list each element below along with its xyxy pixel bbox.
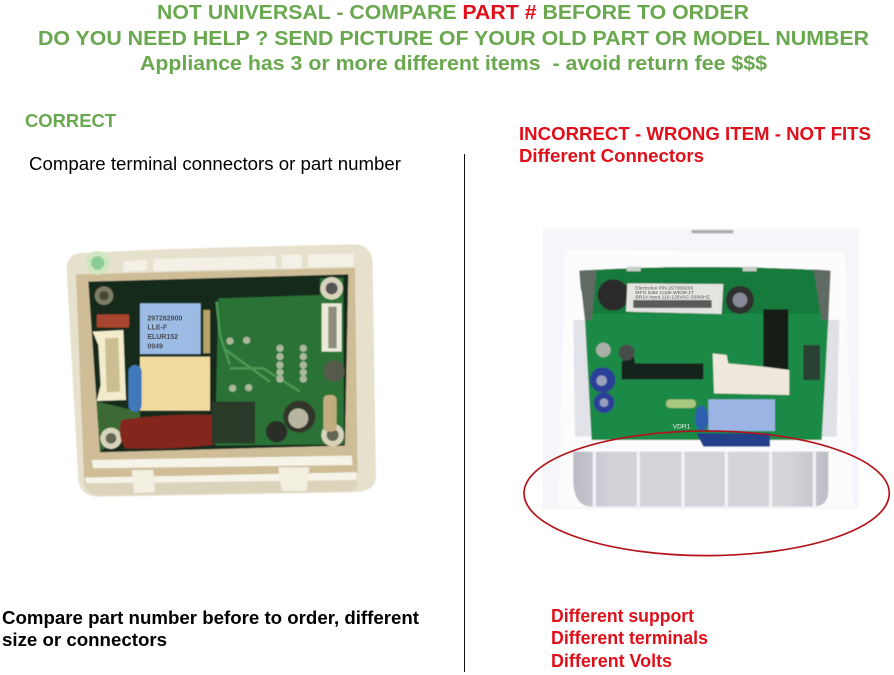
- photo: incorrect control board: [524, 228, 889, 556]
- text: compare connectors: Compare terminal connectors or part number: [29, 154, 401, 174]
- part number label text: 297282900: [147, 315, 182, 322]
- circuit board: [88, 274, 348, 452]
- text: list of differences: [551, 606, 708, 671]
- part number label text: ELUR152: [147, 334, 178, 341]
- buzzer: [598, 279, 629, 311]
- chip row: [622, 353, 703, 379]
- text: list of differences: Different support: [551, 606, 694, 626]
- top capacitor: [726, 286, 754, 314]
- board label text: MFG Date Code WK09-1T: [635, 290, 694, 296]
- text: list of differences: Different terminals: [551, 628, 708, 648]
- resistor: [666, 399, 696, 408]
- white relay: [713, 353, 789, 395]
- photo: correct control board: [67, 244, 376, 497]
- header pins: [803, 345, 820, 380]
- header line 1: NOT UNIVERSAL - COMPARE PART # BEFORE TO ORDER: [157, 2, 750, 24]
- heading: incorrect: [519, 124, 871, 166]
- blue capacitor block: [708, 399, 775, 431]
- heading: correct: CORRECT: [25, 111, 116, 131]
- green board: [579, 267, 830, 440]
- text: list of differences: Different Volts: [551, 651, 672, 671]
- header line 3: Appliance has 3 or more different items - avoid return fee $$$: [140, 53, 767, 75]
- text: compare part number note: size or connectors: [2, 630, 167, 650]
- lower lip and clips: [92, 456, 353, 468]
- part number label text: LLE-F: [147, 325, 168, 332]
- red ellipse callout: [524, 431, 889, 556]
- connectors: [93, 330, 126, 401]
- text: compare part number note: Compare part number before to order, different: [2, 608, 419, 628]
- blue capacitors: [590, 367, 615, 393]
- part number label text: [147, 315, 182, 350]
- black relay: [763, 309, 788, 369]
- center divider: [464, 154, 465, 672]
- white label: [626, 283, 723, 314]
- board label text: [635, 285, 710, 301]
- header: warning text: [38, 2, 870, 75]
- board marking: VDR1: [673, 423, 691, 430]
- heading: incorrect: INCORRECT - WRONG ITEM - NOT FITS: [519, 124, 871, 144]
- blue relay label: [140, 303, 201, 354]
- capacitors: [97, 314, 129, 328]
- recessed base with ribs: [573, 452, 828, 507]
- plastic housing: [67, 244, 376, 497]
- top notch: [692, 230, 733, 233]
- yellow relay: [140, 357, 210, 411]
- text: compare part number note: [2, 608, 419, 650]
- white housing: [543, 228, 859, 509]
- heading: incorrect: Different Connectors: [519, 146, 704, 166]
- part number label text: 0949: [147, 343, 163, 350]
- board label text: Electrolux P/N 297369200: [635, 285, 693, 291]
- header line 2: DO YOU NEED HELP ? SEND PICTURE OF YOUR OLD PART OR MODEL NUMBER: [38, 28, 870, 50]
- board label text: BR14 Input 110-120VAC 50/60HZ: [635, 295, 710, 301]
- screws: [95, 286, 113, 305]
